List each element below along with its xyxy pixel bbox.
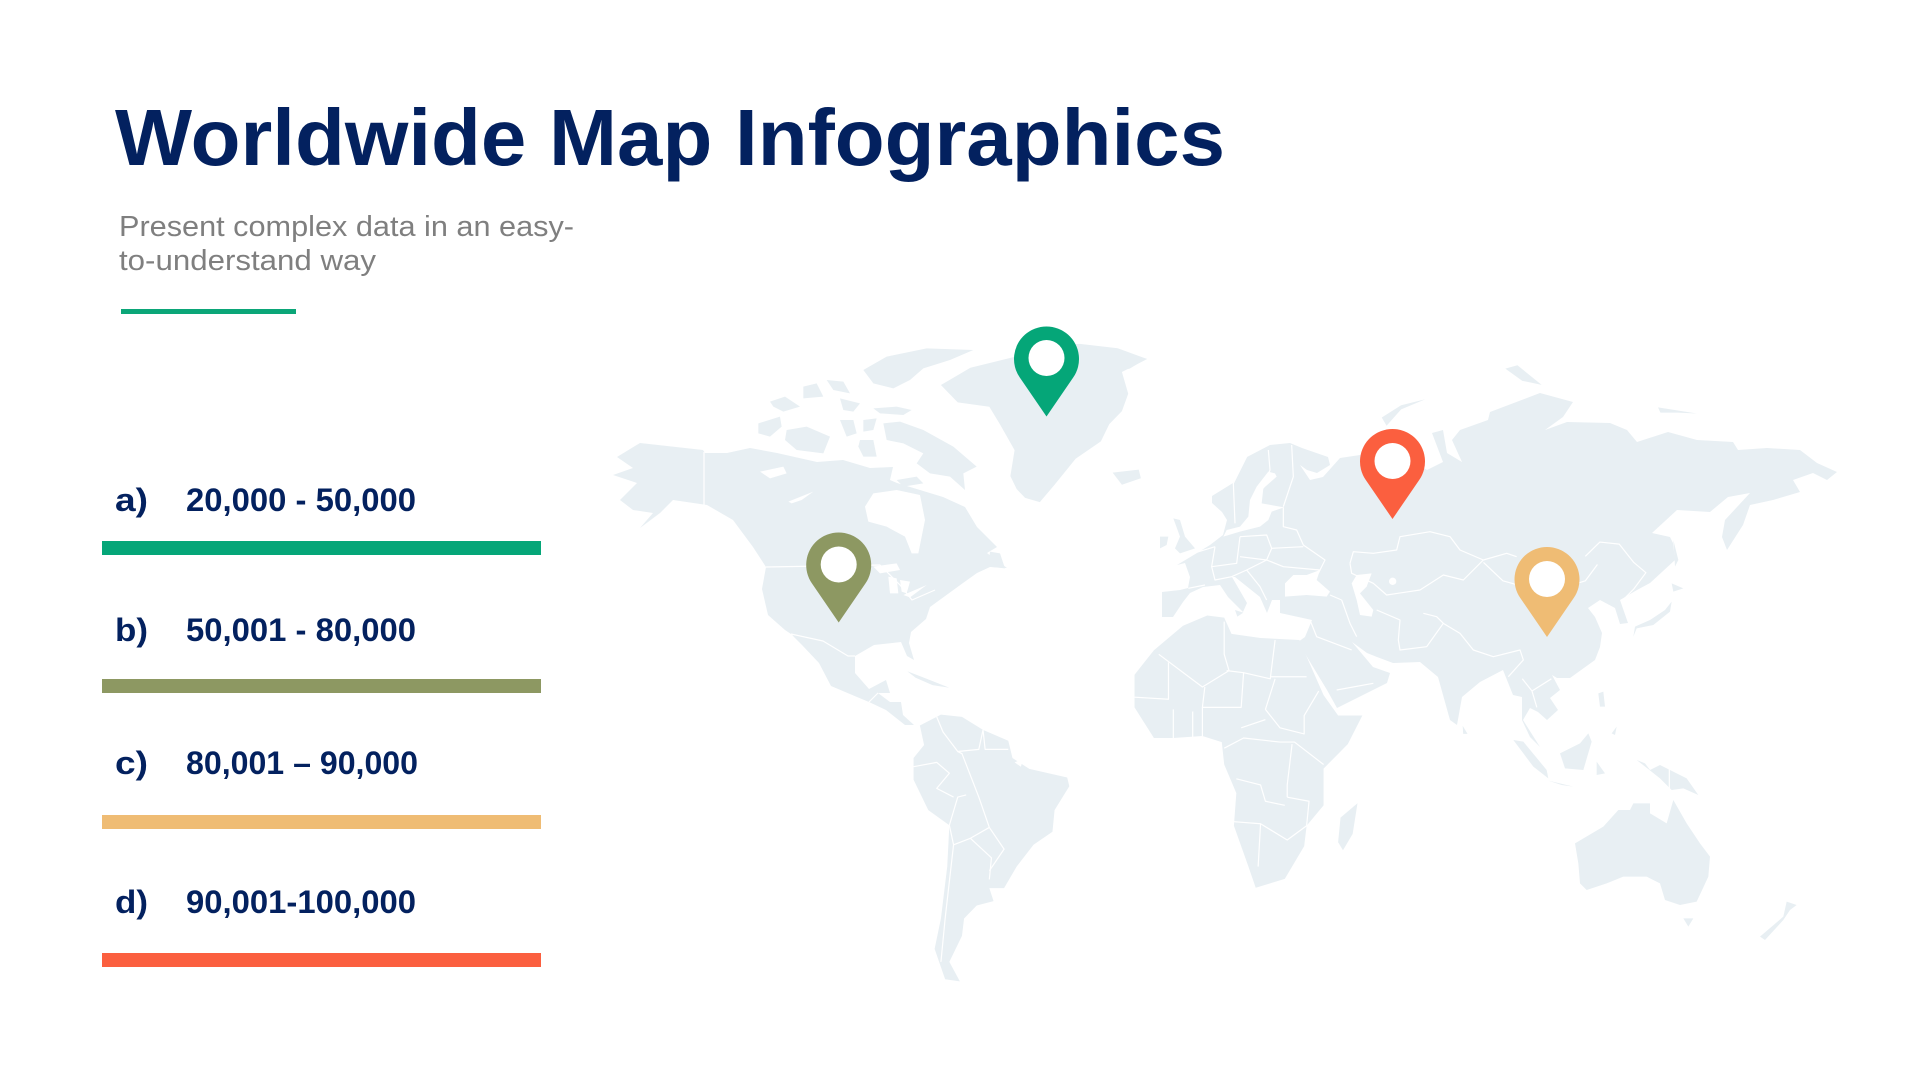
world map (613, 344, 1837, 981)
subtitle: Present complex data in an easy- (119, 211, 574, 243)
legend item a (102, 482, 541, 555)
icon: red map pin (1360, 429, 1425, 519)
map: Eurasia mainland (1162, 393, 1837, 747)
legend item b: b) (115, 612, 148, 648)
title: Worldwide Map Infographics (115, 93, 1225, 182)
map: Indonesia and Oceania (1513, 733, 1797, 940)
legend item c: c) (115, 745, 148, 781)
map: North America mainland (613, 443, 1007, 725)
icon: orange map pin (1514, 547, 1580, 637)
legend (102, 482, 541, 967)
legend item b (102, 612, 541, 693)
map: Africa, Arctic Russia, East Asian islands and Indian Ocean (1120, 358, 1697, 888)
map: Japan and Philippines (1598, 540, 1683, 735)
legend item d: d) (115, 884, 148, 920)
legend item d: 90,001-100,000 (186, 884, 416, 920)
icon: green map pin (1014, 326, 1079, 416)
map: European seas, islands and Asian borders (1160, 445, 1523, 690)
map: Greenland, Caribbean and South America (907, 344, 1147, 981)
legend item b: 50,001 - 80,000 (186, 612, 416, 648)
title underline (121, 309, 296, 314)
subtitle: to-understand way (119, 245, 377, 277)
legend item c (102, 745, 541, 829)
icon: olive map pin (806, 532, 871, 622)
subtitle (119, 211, 574, 277)
legend item a: 20,000 - 50,000 (186, 482, 416, 518)
legend item c: 80,001 – 90,000 (186, 745, 418, 781)
map: Canadian Arctic islands and Hudson Bay (758, 348, 1005, 597)
legend item a: a) (115, 482, 148, 518)
legend item d (102, 884, 541, 967)
